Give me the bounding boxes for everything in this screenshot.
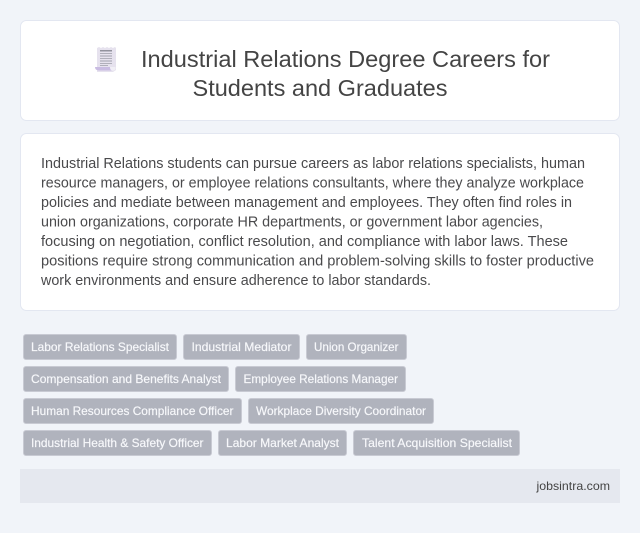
tag: Talent Acquisition Specialist [362, 436, 513, 450]
tag: Union Organizer [314, 340, 399, 354]
tag: Industrial Mediator [192, 340, 292, 354]
tag [24, 430, 212, 456]
text block: description: Industrial Relations students can pursue careers as labor relations specialists, human [41, 156, 585, 172]
tag [24, 334, 176, 360]
tag [236, 366, 406, 392]
tag: Labor Relations Specialist [31, 340, 170, 354]
icon: scroll document [95, 47, 116, 72]
footer: jobsintra.com [535, 479, 610, 493]
tag [354, 430, 520, 456]
tag: Workplace Diversity Coordinator [256, 404, 426, 418]
tag: Industrial Health & Safety Officer [31, 436, 204, 450]
tag: Employee Relations Manager [244, 372, 398, 386]
footer [20, 469, 620, 503]
tag: Labor Market Analyst [226, 436, 340, 450]
text block: description: positions require strong communication and problem-solving skills to foster productive [41, 254, 594, 270]
text block: description [40, 156, 594, 289]
text block: description: focusing on negotiation, conflict resolution, and compliance with labor laws. These [41, 234, 568, 250]
text block: description: union organizations, corporate HR departments, or government labor agencies, [41, 214, 543, 230]
tag: Human Resources Compliance Officer [31, 404, 234, 418]
panel: header [20, 20, 620, 120]
tag [306, 334, 406, 360]
tag [24, 398, 242, 424]
title: Industrial Relations Degree Careers for [141, 46, 550, 72]
panel: description [20, 134, 620, 310]
tag [184, 334, 300, 360]
text block: description: resource managers, or employee relations consultants, where they analyze workplace [41, 176, 584, 192]
title [141, 46, 550, 101]
tag [248, 398, 434, 424]
text block: description: policies and mediate between management and employees. They often find roles in [41, 195, 572, 211]
tag [24, 366, 228, 392]
tag: Compensation and Benefits Analyst [31, 372, 222, 386]
text block: description: work environments and ensure adherence to labor standards. [40, 273, 431, 289]
tag list: careers [24, 334, 520, 456]
tag [218, 430, 346, 456]
title: Students and Graduates [192, 75, 448, 101]
